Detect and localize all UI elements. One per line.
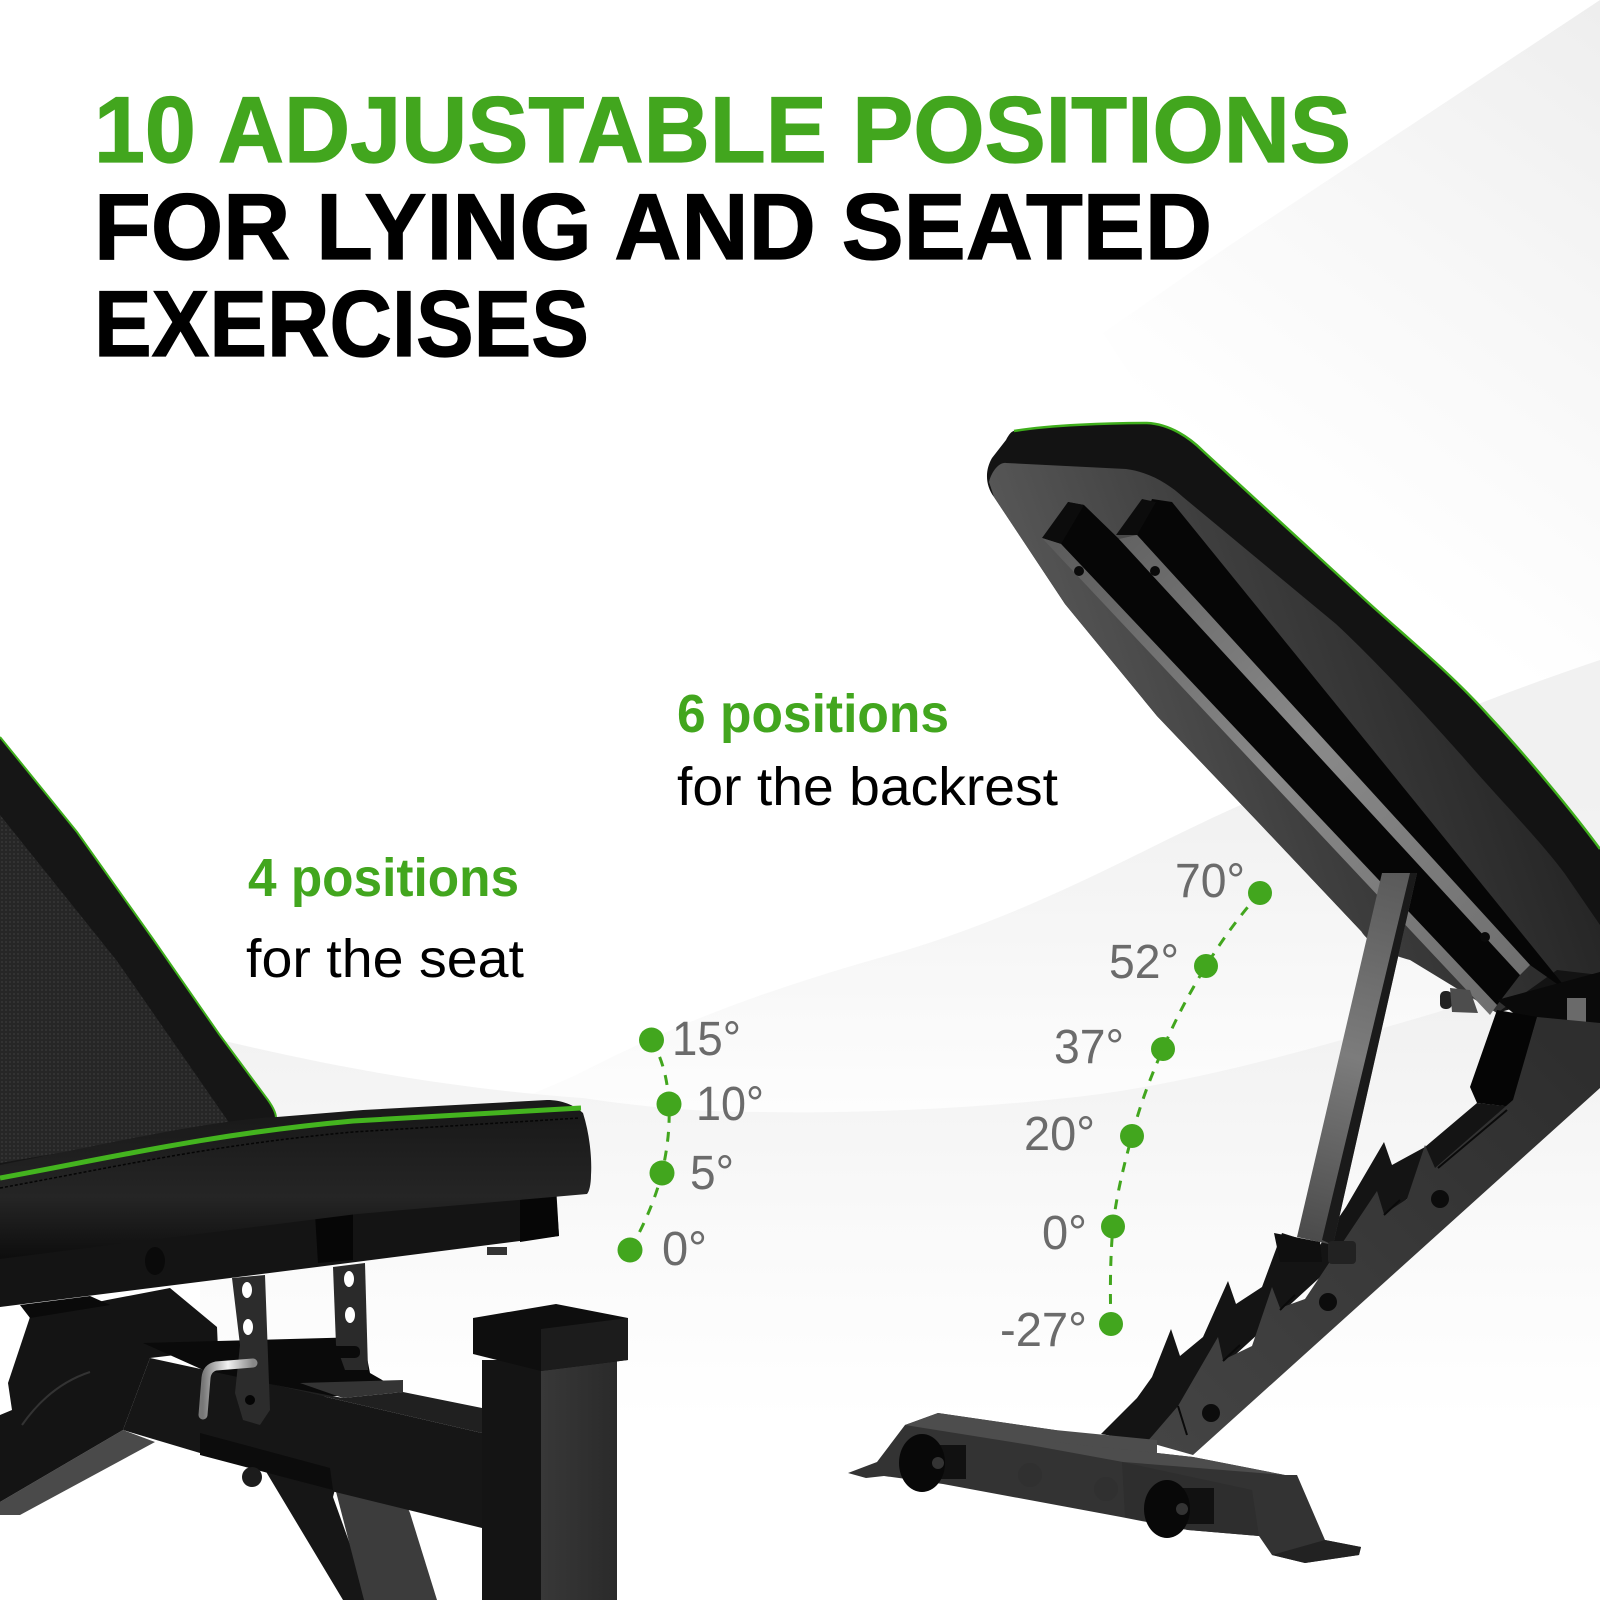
notched frame beam — [1101, 1010, 1600, 1455]
callout: 6 positions for the backrest: for the backrest — [677, 757, 1058, 817]
callout: 6 positions for the backrest — [677, 684, 1058, 817]
base with wheels — [848, 1413, 1361, 1563]
title — [94, 77, 1351, 376]
background swooshes — [200, 0, 1600, 1430]
upright post with cap — [473, 1304, 628, 1600]
callout: 4 positions for the seat: for the seat — [246, 929, 524, 989]
callout: 4 positions for the seat: 4 positions — [248, 848, 519, 908]
seat under-rail — [0, 1185, 559, 1318]
backrest with mesh panel — [0, 737, 277, 1200]
callout: 6 positions for the backrest: 6 positions — [677, 684, 949, 744]
title: EXERCISES — [94, 271, 589, 376]
hinge nuts — [1440, 972, 1600, 1032]
callout: 4 positions for the seat — [246, 848, 524, 989]
seat cushion with green piping — [0, 1100, 591, 1259]
seat rails under backrest — [1042, 499, 1570, 1015]
seat angle scale: 15° — [672, 1013, 741, 1066]
backrest angle scale: 20° — [1024, 1108, 1095, 1161]
backrest angle scale: 0° — [1042, 1207, 1087, 1260]
backrest pad — [987, 423, 1600, 1013]
title: 10 ADJUSTABLE POSITIONS — [94, 77, 1351, 182]
support strut — [1274, 873, 1417, 1264]
backrest angle scale: 37° — [1054, 1021, 1124, 1074]
backrest angle scale: 70° — [1175, 855, 1245, 908]
right bench: backrest view — [848, 423, 1600, 1563]
left bench: seat view — [0, 737, 628, 1600]
seat angle scale: 10° — [696, 1078, 764, 1131]
backrest angle scale: 52° — [1109, 936, 1179, 989]
backrest angle scale: -27° — [1000, 1304, 1087, 1357]
seat angle scale: 0° — [662, 1223, 707, 1276]
seat angle scale: 5° — [690, 1147, 734, 1200]
seat angle scale — [618, 1013, 764, 1276]
backrest angle scale — [1000, 855, 1272, 1357]
title: FOR LYING AND SEATED — [94, 174, 1212, 279]
lower frame legs — [0, 1288, 482, 1600]
hinged hole plates and locking pin — [203, 1263, 368, 1425]
